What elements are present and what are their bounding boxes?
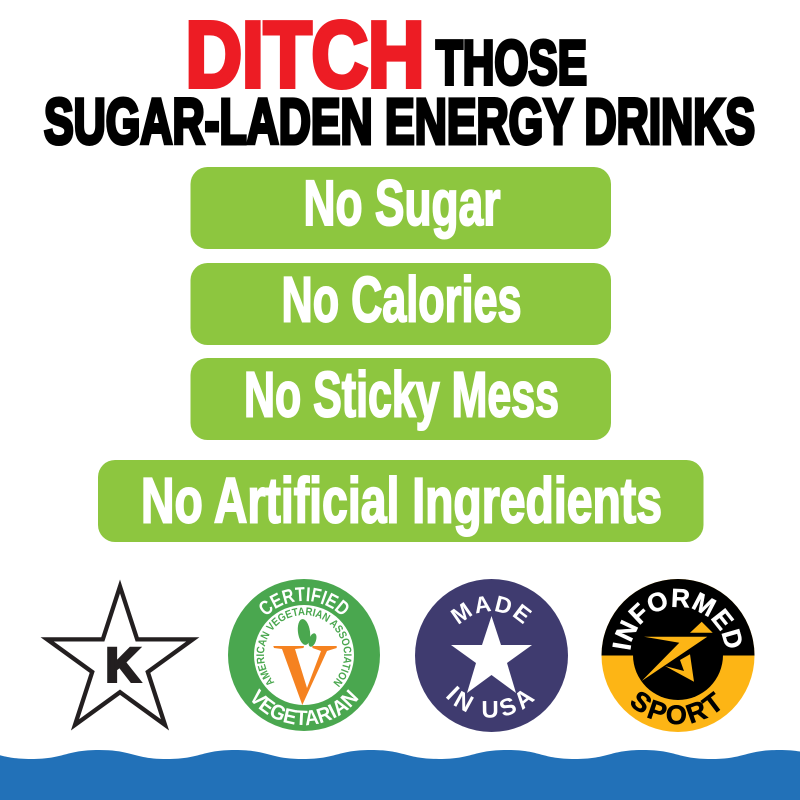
badge: certified vegetarian bbox=[228, 579, 380, 731]
pill: no calories bbox=[190, 263, 611, 345]
badge: star-K kosher bbox=[47, 586, 193, 725]
badge: made in USA: IN USA bbox=[446, 686, 535, 718]
badge: made in USA bbox=[415, 579, 568, 732]
badge: made in USA: MADE bbox=[450, 596, 532, 624]
badge: certified vegetarian: VEGETARIAN bbox=[252, 688, 358, 726]
pill: no calories: No Calories bbox=[282, 264, 522, 336]
pill: no sugar: No Sugar bbox=[304, 167, 500, 239]
badge: certified vegetarian: CERTIFIED bbox=[260, 587, 348, 614]
title bbox=[44, 2, 755, 158]
heading word: THOSE: THOSE bbox=[436, 28, 587, 98]
badge: informed sport: INFORMED bbox=[612, 588, 742, 650]
badge: certified vegetarian: AMERICAN VEGETARIAN ASSOCIATION bbox=[256, 607, 352, 688]
badge: star-K kosher: K bbox=[106, 640, 140, 692]
wave footer bbox=[0, 750, 800, 800]
carrot leaves bbox=[296, 618, 318, 648]
badge: informed sport bbox=[602, 579, 754, 732]
pill: no sticky mess: No Sticky Mess bbox=[244, 359, 559, 431]
heading word: DITCH: DITCH bbox=[186, 2, 424, 106]
pill: no sugar bbox=[190, 167, 611, 249]
pill: no sticky mess bbox=[190, 358, 611, 440]
running figure logo bbox=[642, 622, 713, 682]
badge: informed sport: SPORT bbox=[631, 691, 720, 724]
carrot V bbox=[273, 646, 337, 705]
